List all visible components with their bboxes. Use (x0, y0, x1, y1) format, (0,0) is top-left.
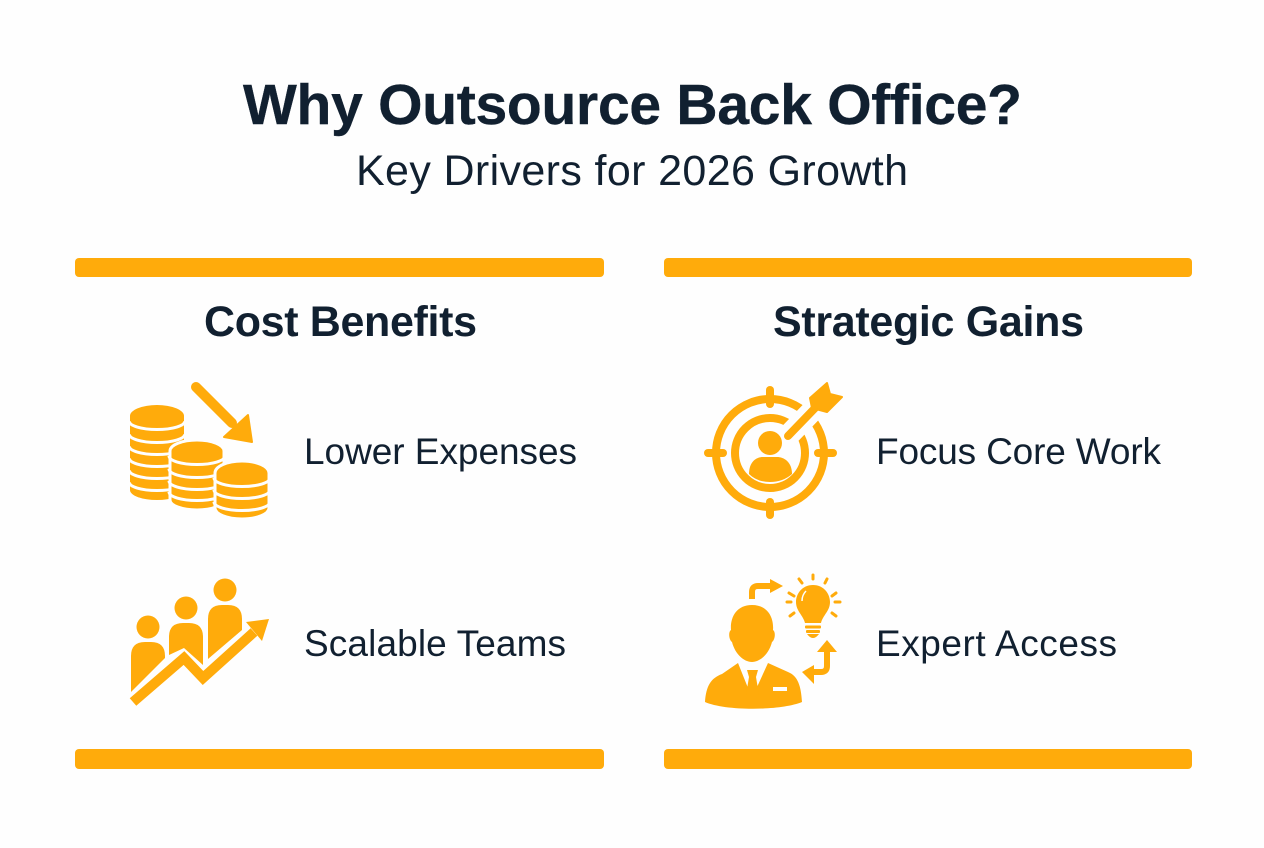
title: Why Outsource Back Office? (243, 73, 1022, 137)
label: scalable teams: Scalable Teams (304, 623, 566, 664)
panel: cost benefits (75, 258, 604, 769)
icon: expert with light bulb (705, 575, 840, 709)
heading: cost benefits: Cost Benefits (204, 298, 477, 346)
label: expert access: Expert Access (876, 623, 1117, 664)
top bar (75, 258, 604, 277)
top bar (664, 258, 1192, 277)
subtitle: Key Drivers for 2026 Growth (356, 147, 908, 195)
bottom bar (75, 749, 604, 769)
icon: target with person and arrow (708, 383, 842, 515)
icon: growing team with arrow (131, 578, 269, 702)
label: focus core work: Focus Core Work (876, 431, 1162, 472)
icon: coin stacks with down arrow (129, 387, 270, 519)
label: lower expenses: Lower Expenses (304, 431, 577, 472)
panel: strategic gains (664, 258, 1192, 769)
heading: strategic gains: Strategic Gains (773, 298, 1084, 346)
bottom bar (664, 749, 1192, 769)
